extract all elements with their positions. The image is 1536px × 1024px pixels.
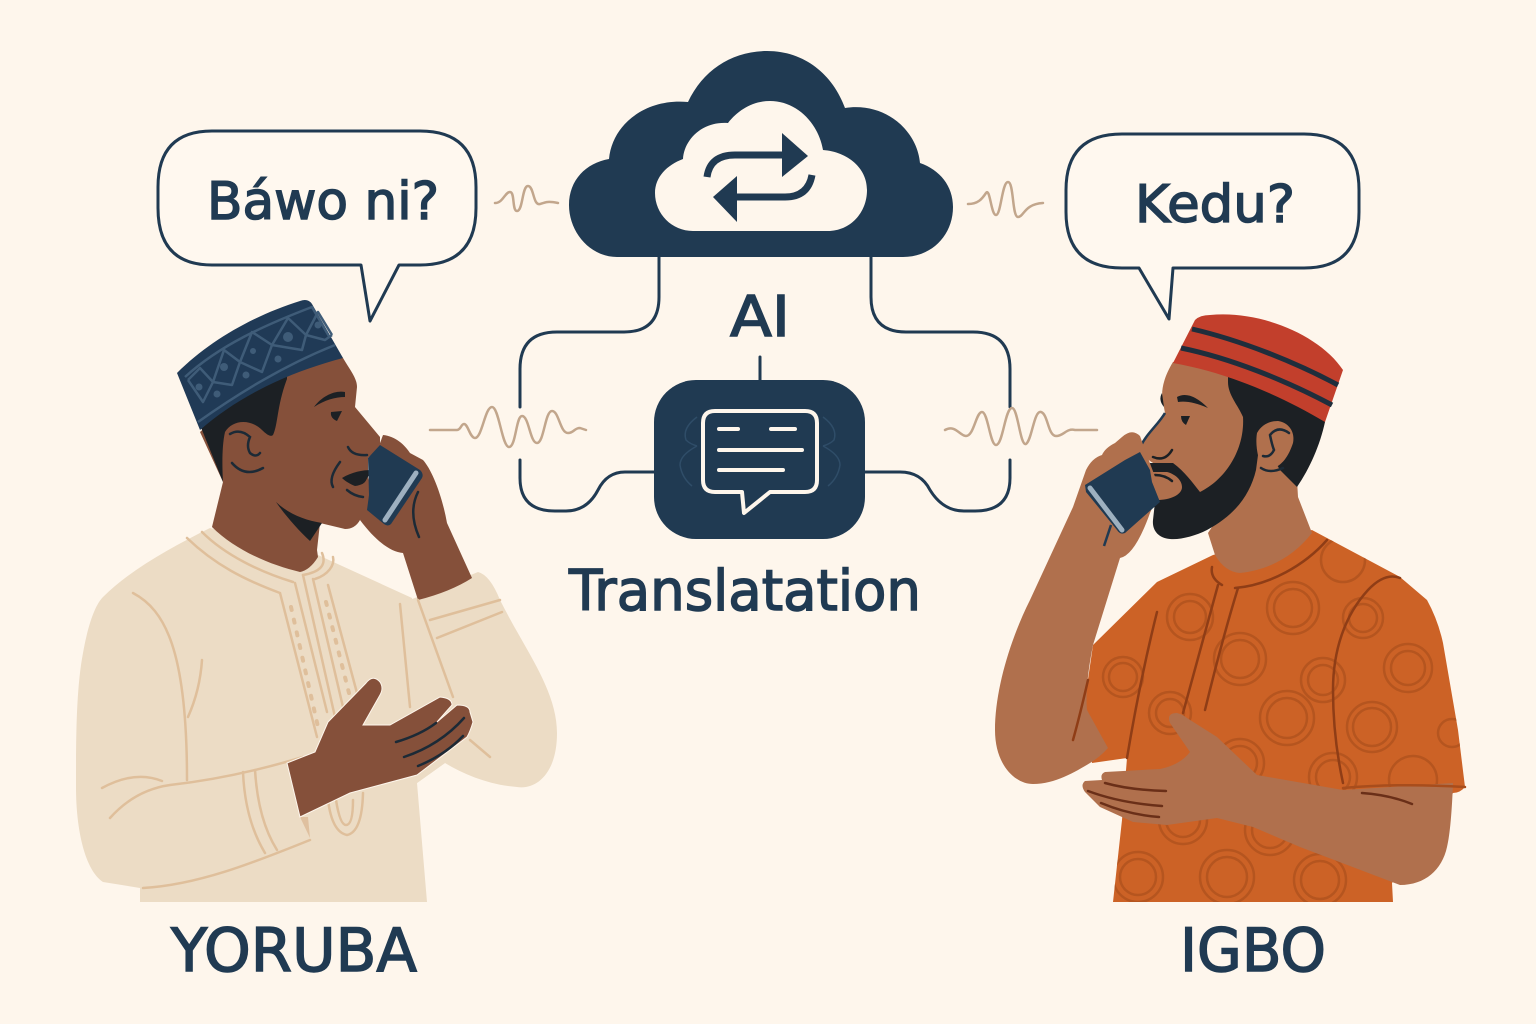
raised arm and hand (995, 432, 1160, 784)
sleeve of raised arm (380, 572, 557, 787)
ear (1256, 421, 1293, 470)
arm crease (1073, 680, 1088, 740)
speech bubble: Yoruba (158, 131, 476, 321)
translation box with chat icon (654, 380, 865, 539)
cap (177, 300, 343, 430)
shirt seams (1127, 540, 1400, 783)
shirt body (76, 528, 445, 902)
cuff shadow (300, 817, 310, 838)
raised hand and forearm (360, 435, 472, 600)
mouth (342, 470, 372, 486)
cap (1173, 314, 1343, 422)
sound waves (430, 182, 1097, 447)
shirt pattern (1103, 538, 1466, 906)
shirt (1085, 530, 1465, 902)
speech bubble: Igbo: Kedu? (1135, 175, 1295, 235)
label: Yoruba: YORUBA (170, 916, 417, 986)
shirt embroidery (102, 532, 502, 888)
speech bubble: Yoruba: Báwo ni? (207, 172, 439, 232)
person: Igbo man (995, 314, 1466, 906)
label: Translatation: Translatation (568, 559, 921, 624)
nose line (1140, 413, 1165, 448)
speech bubble: Igbo (1066, 134, 1359, 319)
cloud icon (569, 51, 953, 257)
hair (200, 370, 287, 482)
lips (1150, 472, 1182, 500)
brow and eye (1177, 395, 1208, 408)
gesturing arm and hand (1082, 713, 1453, 885)
gesturing hand and arm (287, 678, 473, 817)
neck (1208, 435, 1312, 573)
connector lines: cloud to translation box (520, 255, 1010, 511)
hair (1228, 375, 1325, 487)
beard (1150, 417, 1262, 539)
phone (367, 445, 423, 526)
ear and face lines (230, 432, 367, 497)
brow and eye (314, 392, 345, 407)
phone (1085, 452, 1160, 534)
head (1140, 362, 1262, 530)
label: Igbo: IGBO (1180, 916, 1326, 986)
label: AI: AI (730, 285, 790, 350)
inner cloud (655, 101, 867, 231)
head and neck (200, 340, 380, 572)
jaw shadow (276, 502, 322, 541)
person: Yoruba man (76, 300, 557, 902)
exchange arrows (707, 155, 812, 197)
